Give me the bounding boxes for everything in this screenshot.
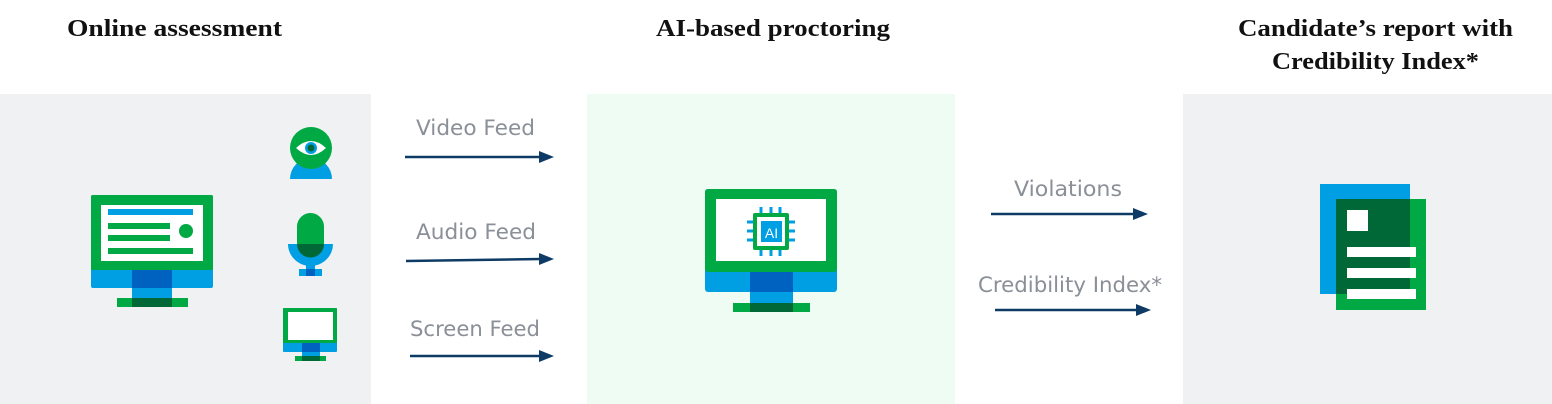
title: candidate's report	[1238, 16, 1513, 75]
title: candidate's report: Candidate’s report with	[1238, 16, 1513, 42]
icon: AI monitor	[705, 189, 837, 312]
arrow: violations: Violations	[1014, 177, 1122, 201]
icon: main monitor	[91, 195, 213, 307]
icon: webcam	[290, 127, 332, 179]
arrow: audio feed: Audio Feed	[416, 220, 536, 244]
title: candidate's report: Credibility Index*	[1272, 49, 1479, 75]
icon: report document	[1320, 184, 1426, 310]
panel: AI proctoring	[587, 94, 955, 404]
icon: AI chip: AI	[765, 225, 778, 241]
arrow: violations	[991, 177, 1148, 220]
icon: screen	[283, 308, 337, 361]
arrow: credibility index	[978, 273, 1162, 316]
arrow: video feed	[405, 116, 554, 163]
arrow: screen feed: Screen Feed	[410, 317, 540, 341]
title: online assessment: Online assessment	[67, 16, 282, 42]
title: AI-based proctoring: AI-based proctoring	[656, 16, 890, 42]
arrow: screen feed	[410, 317, 554, 362]
arrow: credibility index: Credibility Index*	[978, 273, 1162, 297]
panel: report	[1183, 94, 1552, 404]
panel: online assessment	[0, 94, 371, 404]
icon: microphone	[288, 213, 333, 276]
arrow: video feed: Video Feed	[416, 116, 535, 140]
arrow: audio feed	[406, 220, 554, 265]
